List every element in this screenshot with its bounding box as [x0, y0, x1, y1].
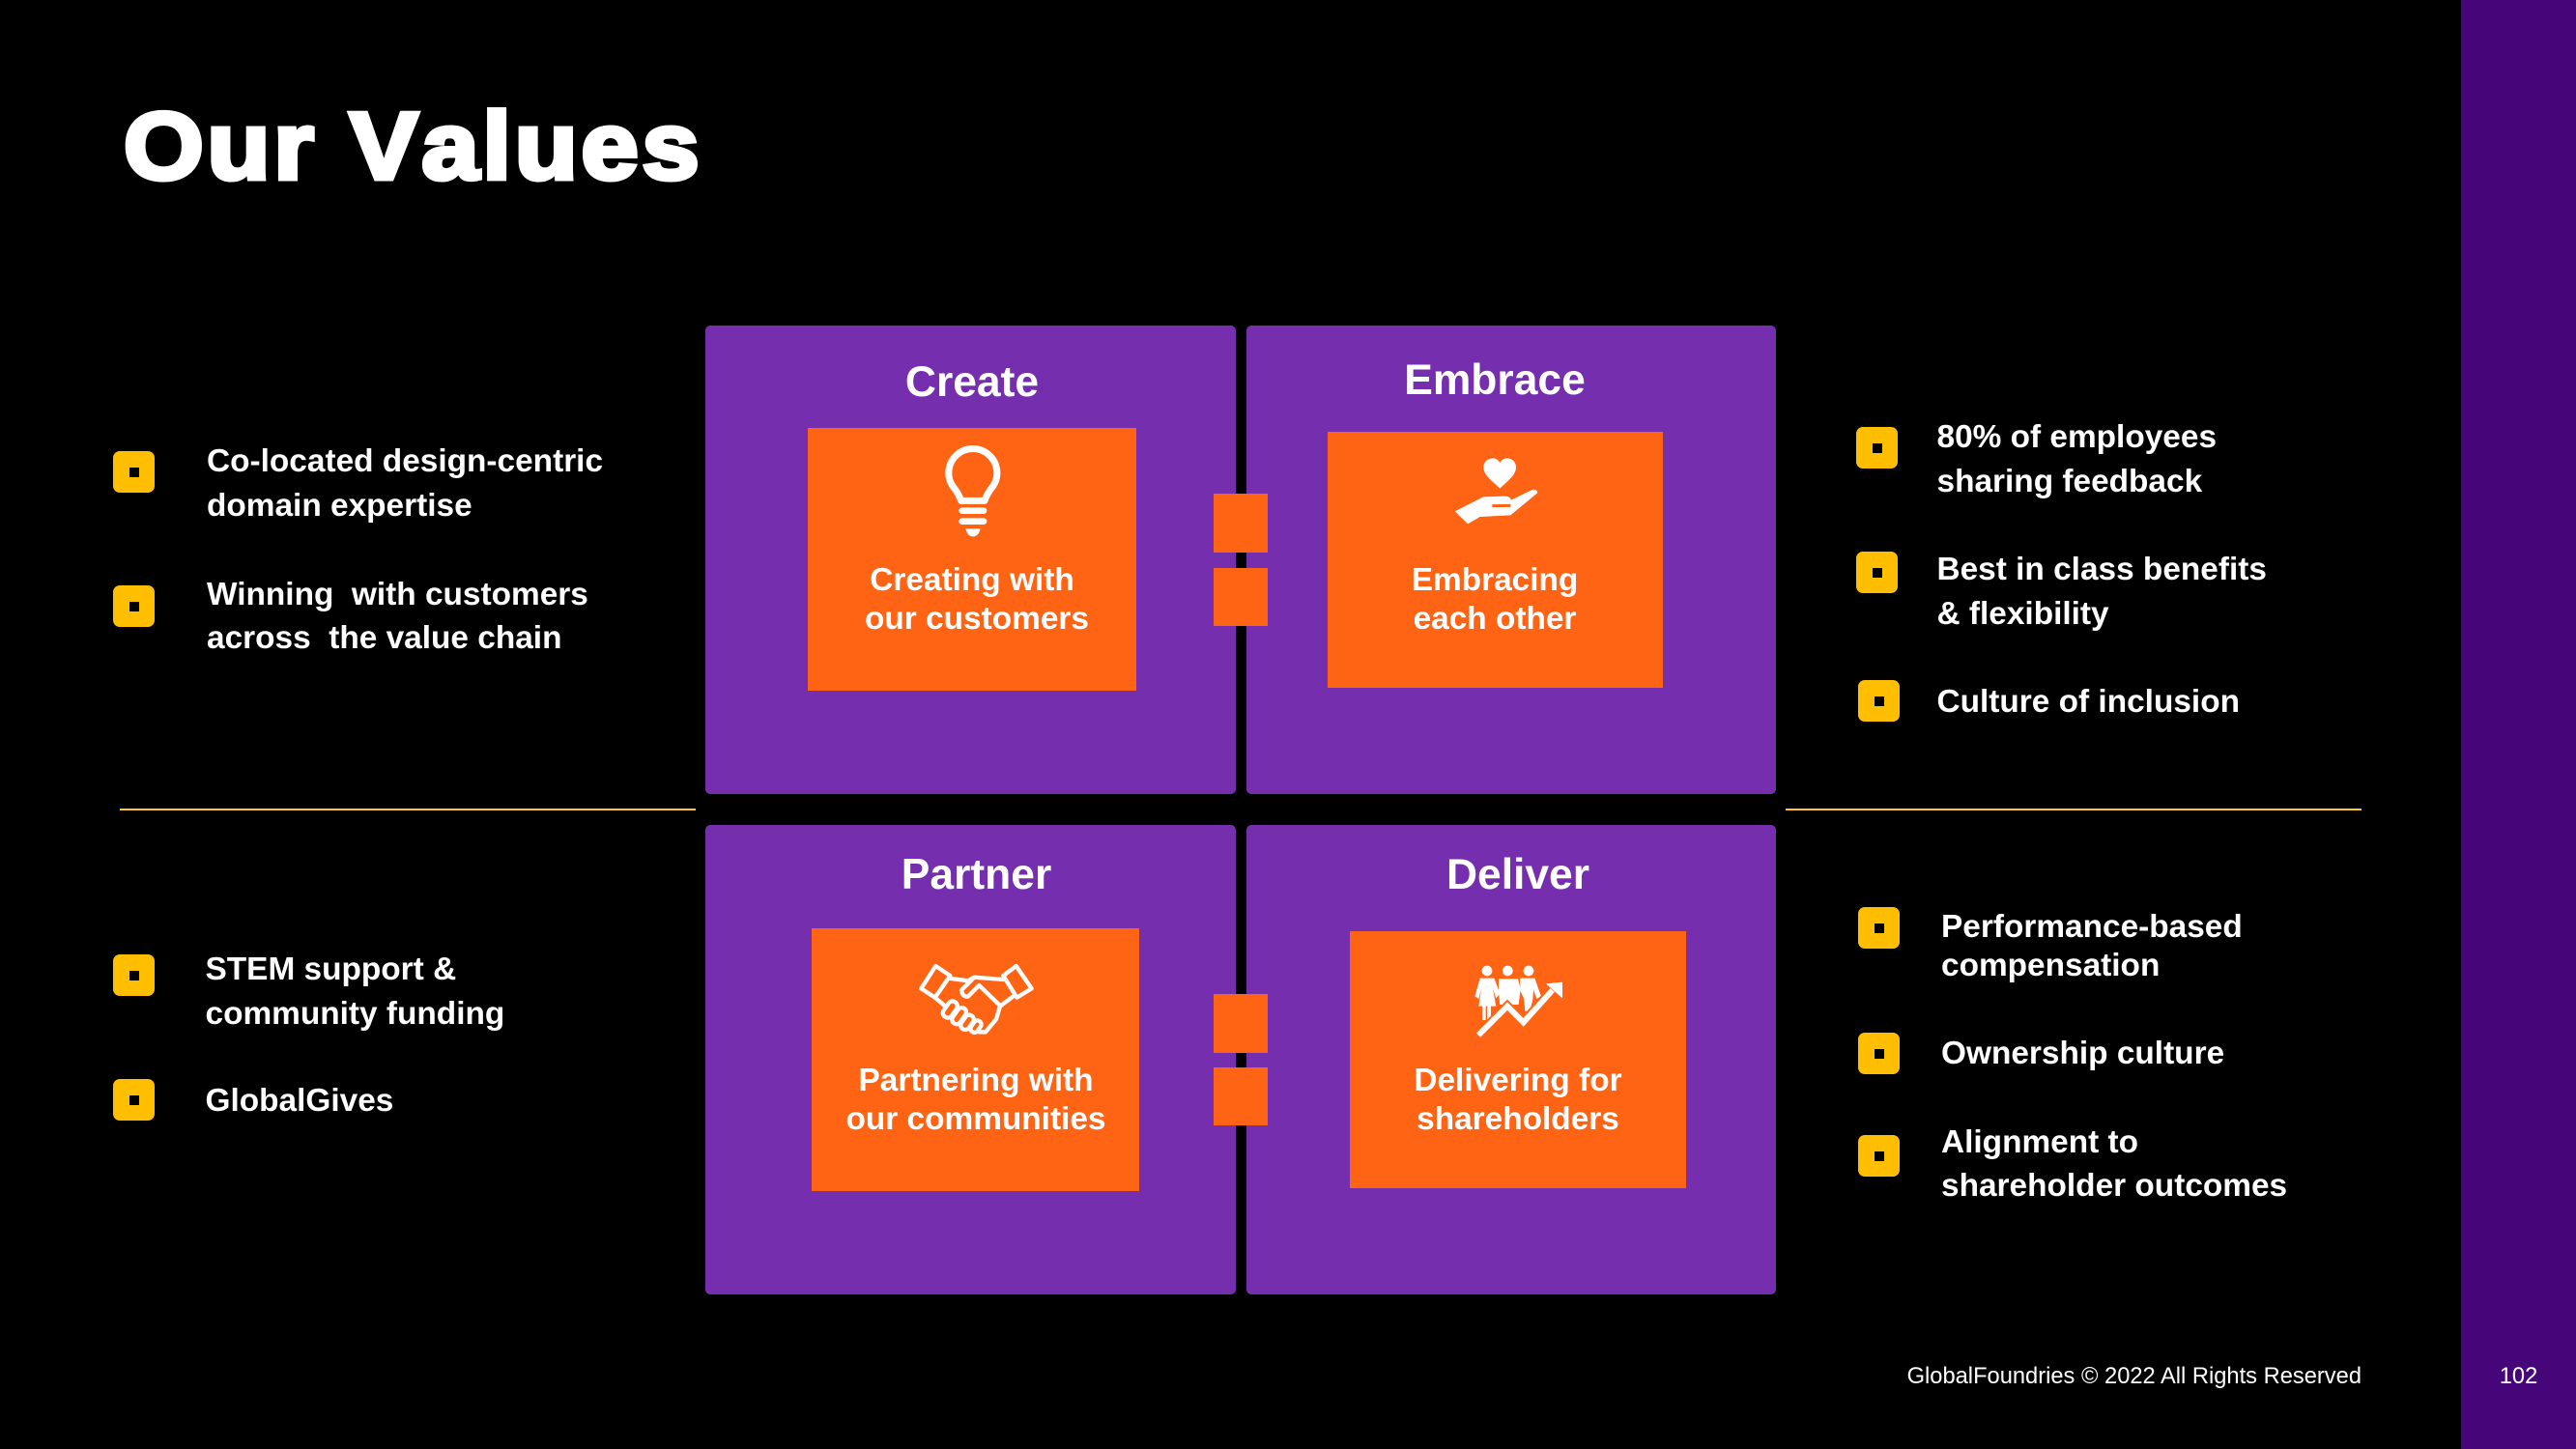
connector: top lower	[1214, 568, 1268, 626]
bullet	[113, 954, 155, 996]
text: stem: STEM support &	[205, 951, 456, 987]
footer: copyright: GlobalFoundries © 2022 All Rights Reserved	[1907, 1364, 2361, 1389]
text: benefits: Best in class benefits	[1936, 552, 2267, 587]
panel: embrace	[1246, 326, 1776, 794]
text: alignment: shareholder outcomes	[1941, 1167, 2287, 1204]
text: embracing each other	[1412, 562, 1578, 636]
text: globalgives: GlobalGives	[205, 1083, 393, 1119]
card: delivering for shareholders	[1350, 931, 1686, 1188]
text: delivering for shareholders: Delivering for	[1414, 1063, 1622, 1097]
list: create points	[113, 442, 603, 656]
bullet	[113, 451, 155, 493]
title: Our Values	[124, 93, 702, 199]
card: partnering with our communities	[812, 928, 1139, 1191]
text: embracing each other: each other	[1414, 601, 1576, 636]
text: co-located	[207, 442, 603, 524]
text: employees feedback: 80% of employees	[1936, 419, 2217, 454]
card: embracing each other	[1328, 432, 1663, 688]
text: partnering with our communities: Partnering with	[858, 1063, 1094, 1097]
heading: deliver: Deliver	[1446, 851, 1589, 898]
text: employees feedback	[1936, 419, 2217, 498]
page number: 102	[2500, 1364, 2537, 1389]
text: delivering for shareholders: shareholders	[1417, 1101, 1619, 1136]
text: winning: Winning with customers across the value chain	[207, 577, 588, 656]
text: creating with our customers: Creating with	[870, 562, 1074, 597]
list: partner points	[113, 951, 504, 1121]
list: deliver points	[1858, 907, 2287, 1204]
panel: deliver	[1246, 825, 1776, 1294]
card: creating with our customers	[808, 428, 1136, 691]
connector: top upper	[1214, 494, 1268, 553]
bullet	[1856, 552, 1898, 593]
icon: people with rising arrow	[1474, 966, 1562, 1037]
bullet	[1856, 427, 1898, 469]
text: benefits	[1936, 552, 2267, 632]
text: embracing each other: Embracing	[1412, 562, 1578, 597]
text: stem	[205, 951, 504, 1032]
heading: partner: Partner	[902, 850, 1051, 898]
text: co-located: Co-located design-centric	[207, 442, 603, 479]
icon: light bulb	[945, 445, 1001, 537]
text: stem: community funding	[205, 995, 504, 1032]
heading: embrace: Embrace	[1404, 355, 1586, 404]
text: delivering for shareholders	[1414, 1063, 1622, 1136]
text: performance	[1941, 908, 2243, 983]
bullet	[1858, 1135, 1900, 1177]
text: alignment: Alignment to	[1941, 1124, 2138, 1159]
bullet	[113, 1079, 155, 1121]
bullet	[113, 585, 155, 627]
text: performance: Performance-based	[1941, 908, 2243, 945]
bullet	[1858, 680, 1900, 722]
icon: handshake	[919, 964, 1034, 1035]
text: employees feedback: sharing feedback	[1936, 464, 2202, 498]
text: ownership: Ownership culture	[1941, 1036, 2224, 1071]
side bar	[2461, 0, 2576, 1449]
connector: bottom lower	[1214, 1067, 1268, 1125]
text: creating with our customers: our customers	[865, 601, 1089, 636]
panel: partner	[705, 825, 1236, 1294]
connector: bottom upper	[1214, 994, 1268, 1053]
bullet	[1858, 1033, 1900, 1074]
icon: hand holding heart	[1455, 458, 1537, 524]
text: creating with our customers	[865, 562, 1089, 636]
panel: create	[705, 326, 1236, 794]
list: embrace points	[1856, 419, 2267, 722]
text: benefits: & flexibility	[1936, 596, 2109, 632]
heading: create: Create	[905, 357, 1039, 406]
text: alignment	[1941, 1124, 2287, 1204]
text: performance: compensation	[1941, 947, 2160, 983]
bullet	[1858, 907, 1900, 949]
text: partnering with our communities: our communities	[845, 1101, 1106, 1136]
text: partnering with our communities	[845, 1063, 1106, 1136]
text: inclusion: Culture of inclusion	[1936, 684, 2240, 720]
text: co-located: domain expertise	[207, 487, 472, 524]
